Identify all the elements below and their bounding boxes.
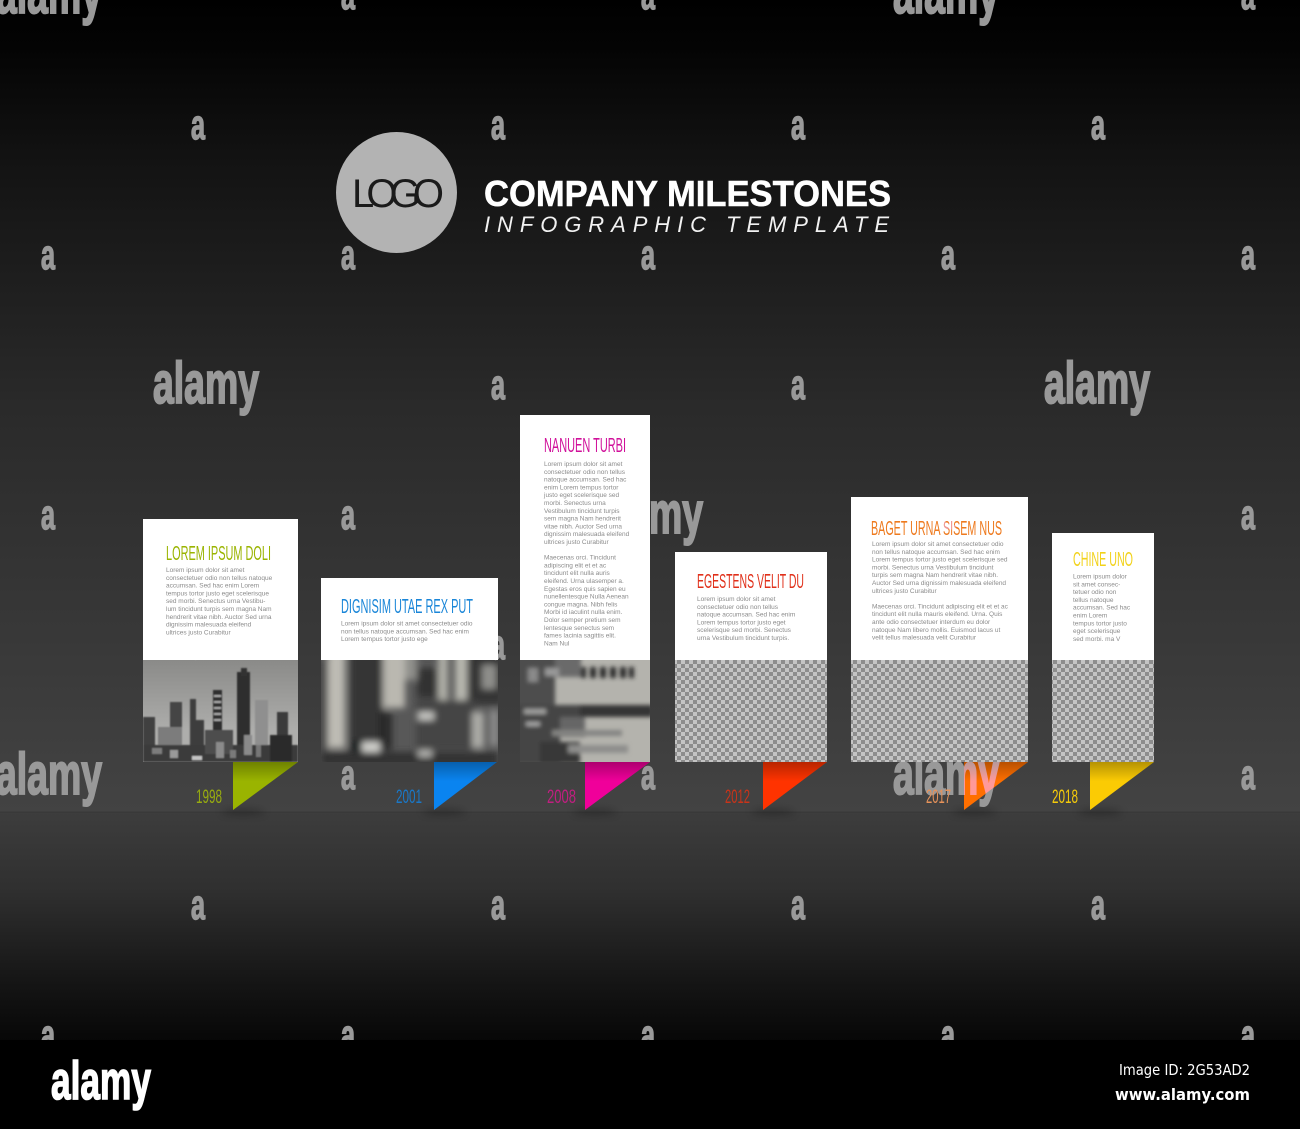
fold 2008: [585, 762, 650, 810]
watermark pattern: a: [191, 621, 205, 668]
body 2008: adipiscing elit et et ac: [544, 562, 607, 569]
milestone 2008: [515, 415, 653, 814]
watermark pattern: a: [791, 621, 805, 668]
body 2017: tincidunt elit nulla mauris eleifend. Urna. Quis: [872, 611, 1003, 618]
body 2018: sed morbi. ma V: [1073, 636, 1121, 643]
body 2018: sit amet consec-: [1073, 581, 1120, 588]
watermark pattern: a: [41, 491, 55, 538]
body 2008: natoque accumsan. Sed hac: [544, 477, 627, 484]
fold shadow 2008: [573, 810, 617, 814]
watermark pattern: a: [341, 231, 355, 278]
watermark pattern: a: [341, 1011, 355, 1058]
watermark pattern: a: [1091, 101, 1105, 148]
watermark pattern: a: [191, 101, 205, 148]
body 2008: tincidunt elit nulla auris: [544, 570, 611, 577]
watermark pattern: a: [1241, 751, 1255, 798]
body 2017: ultrices justo Curabitur: [872, 588, 937, 595]
body 2017: ante odio consectetuer interdum eu dolor: [872, 619, 991, 626]
watermark pattern: a: [791, 101, 805, 148]
heading 2008: NANUEN TURBI: [544, 435, 626, 457]
body 2008: sem magna Nam hendrerit: [544, 516, 621, 523]
watermark pattern: a: [491, 361, 505, 408]
heading 2017: BAGET URNA SISEM NUS: [871, 518, 1002, 540]
photo: blurred facade: [520, 660, 650, 762]
body 2001: Lorem ipsum dolor sit amet consectetuer odio: [341, 620, 473, 628]
body 2008: vitae nibh. Auctor Sed urna: [544, 523, 622, 530]
footer logo: alamy: [51, 1051, 151, 1111]
body 2012: scelerisque sed morbi. Senectus: [697, 627, 792, 634]
body 2012: natoque accumsan. Sed hac enim: [697, 612, 795, 619]
year 2012: 2012: [725, 787, 750, 808]
fold shadow 2017: [952, 810, 996, 814]
watermark pattern: a: [1241, 1011, 1255, 1058]
watermark pattern: a: [791, 881, 805, 928]
watermark pattern: a: [941, 231, 955, 278]
body 2017: Lorem tempus tortor justo eget scelerisque sed: [872, 557, 1008, 564]
fold shadow 2018: [1078, 810, 1122, 814]
body 1998: hendrerit vitae nibh. Auctor Sed urna: [166, 614, 272, 621]
watermark pattern: a: [41, 231, 55, 278]
body 2001: Lorem tempus tortor justo ege: [341, 636, 428, 643]
milestone 2001: [315, 578, 503, 814]
watermark pattern: a: [191, 881, 205, 928]
body 2017: Auctor Sed urna dignissim malesuada eleifend: [872, 580, 1006, 587]
watermark pattern: alamy: [153, 351, 259, 416]
fold 2012: [763, 762, 827, 810]
body 2012: consectetuer odio non tellus: [697, 604, 779, 611]
year 2001: 2001: [396, 787, 422, 808]
card 2008: [520, 415, 650, 660]
watermark pattern: a: [491, 881, 505, 928]
watermark pattern: a: [491, 621, 505, 668]
watermark pattern: alamy: [893, 742, 999, 807]
body 2008: nunellentesque Nulla Aenean: [544, 594, 629, 601]
body 2008: ultrices justo Curabitur: [544, 539, 609, 546]
body 2012: urna Vestibulum tincidunt turpis.: [697, 635, 789, 642]
heading 2001: DIGNISIM UTAE REX PUT: [341, 596, 473, 618]
body 2008: lentesque senectus sem: [544, 625, 614, 632]
body 2008: Dolor semper pretium sem: [544, 617, 621, 624]
body 2008: enim Lorem tempus tortor: [544, 484, 619, 491]
body 2018: eget scelerisque: [1073, 628, 1121, 635]
body 2017: morbi. Senectus urna Vestibulum tincidunt: [872, 564, 994, 571]
body 1998: ultrices justo Curabitur: [166, 629, 231, 636]
photo placeholder 2012: [675, 660, 827, 762]
body 2017: velit tellus malesuada velit Curabitur: [872, 635, 977, 642]
website: www.alamy.com: [1115, 1085, 1250, 1104]
watermark pattern: alamy: [1044, 351, 1150, 416]
body 2008: eleifend. Urna ulasemper a.: [544, 578, 624, 585]
body 2018: tellus natoque: [1073, 597, 1114, 604]
fold 2018: [1090, 762, 1154, 810]
card 1998: [143, 519, 298, 660]
milestone 2012: [675, 552, 827, 814]
body 2018: enim Lorem: [1073, 612, 1107, 620]
body 1998: Lorem ipsum dolor sit amet: [166, 567, 245, 574]
body 2018: accumsan. Sed hac: [1073, 605, 1131, 612]
body 2017: Maecenas orci. Tincidunt adipiscing elit et et ac: [872, 603, 1009, 610]
body 2008: Vestibulum tincidunt turpis: [544, 508, 620, 515]
year 1998: 1998: [196, 787, 222, 808]
card 2001: [321, 578, 498, 660]
body 2018: tetuer odio non: [1073, 589, 1117, 596]
photo placeholder 2017: [851, 660, 1028, 762]
year 2008: 2008: [547, 787, 576, 808]
card 2017: [851, 497, 1028, 660]
fold shadow 2001: [422, 810, 466, 814]
horizon line: [0, 812, 1300, 813]
watermark pattern: alamy: [0, 742, 102, 807]
body 2008: morbi. Senectus urna: [544, 500, 606, 507]
watermark pattern: alamy: [597, 481, 703, 546]
fold shadow 2012: [751, 810, 795, 814]
background wall: [0, 0, 1300, 812]
body 2008: congue magna. Nibh felis: [544, 601, 618, 608]
watermark pattern: a: [641, 231, 655, 278]
watermark pattern: a: [491, 101, 505, 148]
heading 2012: EGESTENS VELIT DU: [697, 571, 804, 593]
year 2017: 2017: [926, 787, 951, 808]
photo placeholder 2018: [1052, 660, 1154, 762]
body 2008: Lorem ipsum dolor sit amet: [544, 461, 623, 468]
heading 1998: LOREM IPSUM DOLI: [166, 543, 271, 565]
body 2012: Lorem tempus tortor justo eget: [697, 619, 786, 626]
watermark pattern: a: [1241, 491, 1255, 538]
watermark pattern: a: [41, 1011, 55, 1058]
image id: Image ID: 2G53AD2: [1119, 1061, 1250, 1079]
watermark pattern: a: [641, 751, 655, 798]
watermark pattern: a: [341, 751, 355, 798]
footer band: [0, 1040, 1300, 1129]
milestone 2017: [851, 497, 1028, 814]
title: COMPANY MILESTONES: [484, 173, 891, 214]
body 1998: consectetuer odio non tellus natoque: [166, 575, 273, 582]
logo: LOGO: [352, 172, 444, 216]
body 1998: accumsan. Sed hac enim Lorem: [166, 583, 259, 590]
body 2008: Egestas eros quis sapien eu: [544, 586, 626, 593]
photo: skyline: [143, 660, 298, 762]
watermark pattern: a: [941, 1011, 955, 1058]
fold 2017: [964, 762, 1028, 810]
watermark pattern: a: [1091, 621, 1105, 668]
watermark pattern: a: [641, 1011, 655, 1058]
watermark pattern: a: [941, 491, 955, 538]
body 2008: Morbi id iaculint nulla enim.: [544, 609, 623, 616]
body 2017: Lorem ipsum dolor sit amet consectetuer odio: [872, 541, 1004, 548]
milestone 1998: [143, 519, 298, 814]
photo: blurred buildings: [321, 660, 498, 762]
card 2012: [675, 552, 827, 660]
body 2001: non tellus natoque accumsan. Sed hac enim: [341, 628, 469, 635]
watermark pattern: a: [1091, 881, 1105, 928]
body 2008: justo eget scelerisque sed: [543, 492, 620, 499]
year 2018: 2018: [1052, 787, 1078, 808]
fold shadow 1998: [221, 810, 265, 814]
body 2017: non tellus natoque accumsan. Sed hac enim: [872, 549, 1000, 556]
body 1998: tempus tortor justo eget scelerisque: [166, 590, 269, 597]
body 2017: turpis sem magna Nam hendrerit vitae nibh.: [872, 572, 998, 579]
body 2017: natoque Nam libero mollis. Euismod lacus ut: [872, 627, 1000, 634]
card 2018: [1052, 533, 1154, 660]
body 2008: Maecenas orci. Tincidunt: [544, 555, 616, 562]
heading 2018: CHINE UNO: [1073, 549, 1133, 571]
body 2018: Lorem ipsum dolor: [1073, 574, 1128, 580]
fold 2001: [434, 762, 497, 810]
body 1998: sed morbi. Senectus urna Vestibu-: [166, 598, 265, 605]
body 1998: lum tincidunt turpis sem magna Nam: [166, 606, 272, 613]
fold 1998: [233, 762, 298, 810]
body 2008: Nam Nul: [544, 640, 570, 647]
body 2008: consectetuer odio non tellus: [544, 469, 626, 476]
logo: [336, 132, 457, 253]
watermark pattern: a: [791, 361, 805, 408]
body 2018: tempus tortor justo: [1073, 620, 1127, 627]
watermark pattern: a: [341, 491, 355, 538]
subtitle: INFOGRAPHIC TEMPLATE: [484, 212, 889, 237]
body 2008: dignissim malesuada eleifend: [544, 531, 630, 538]
body 2012: Lorem ipsum dolor sit amet: [697, 596, 776, 603]
watermark pattern: a: [1241, 231, 1255, 278]
body 2008: fames lacinia sagittis elit.: [544, 633, 616, 640]
body 1998: dignissim malesuada eleifend: [166, 622, 252, 629]
milestone 2018: [1052, 533, 1154, 814]
background floor: [0, 812, 1300, 1040]
